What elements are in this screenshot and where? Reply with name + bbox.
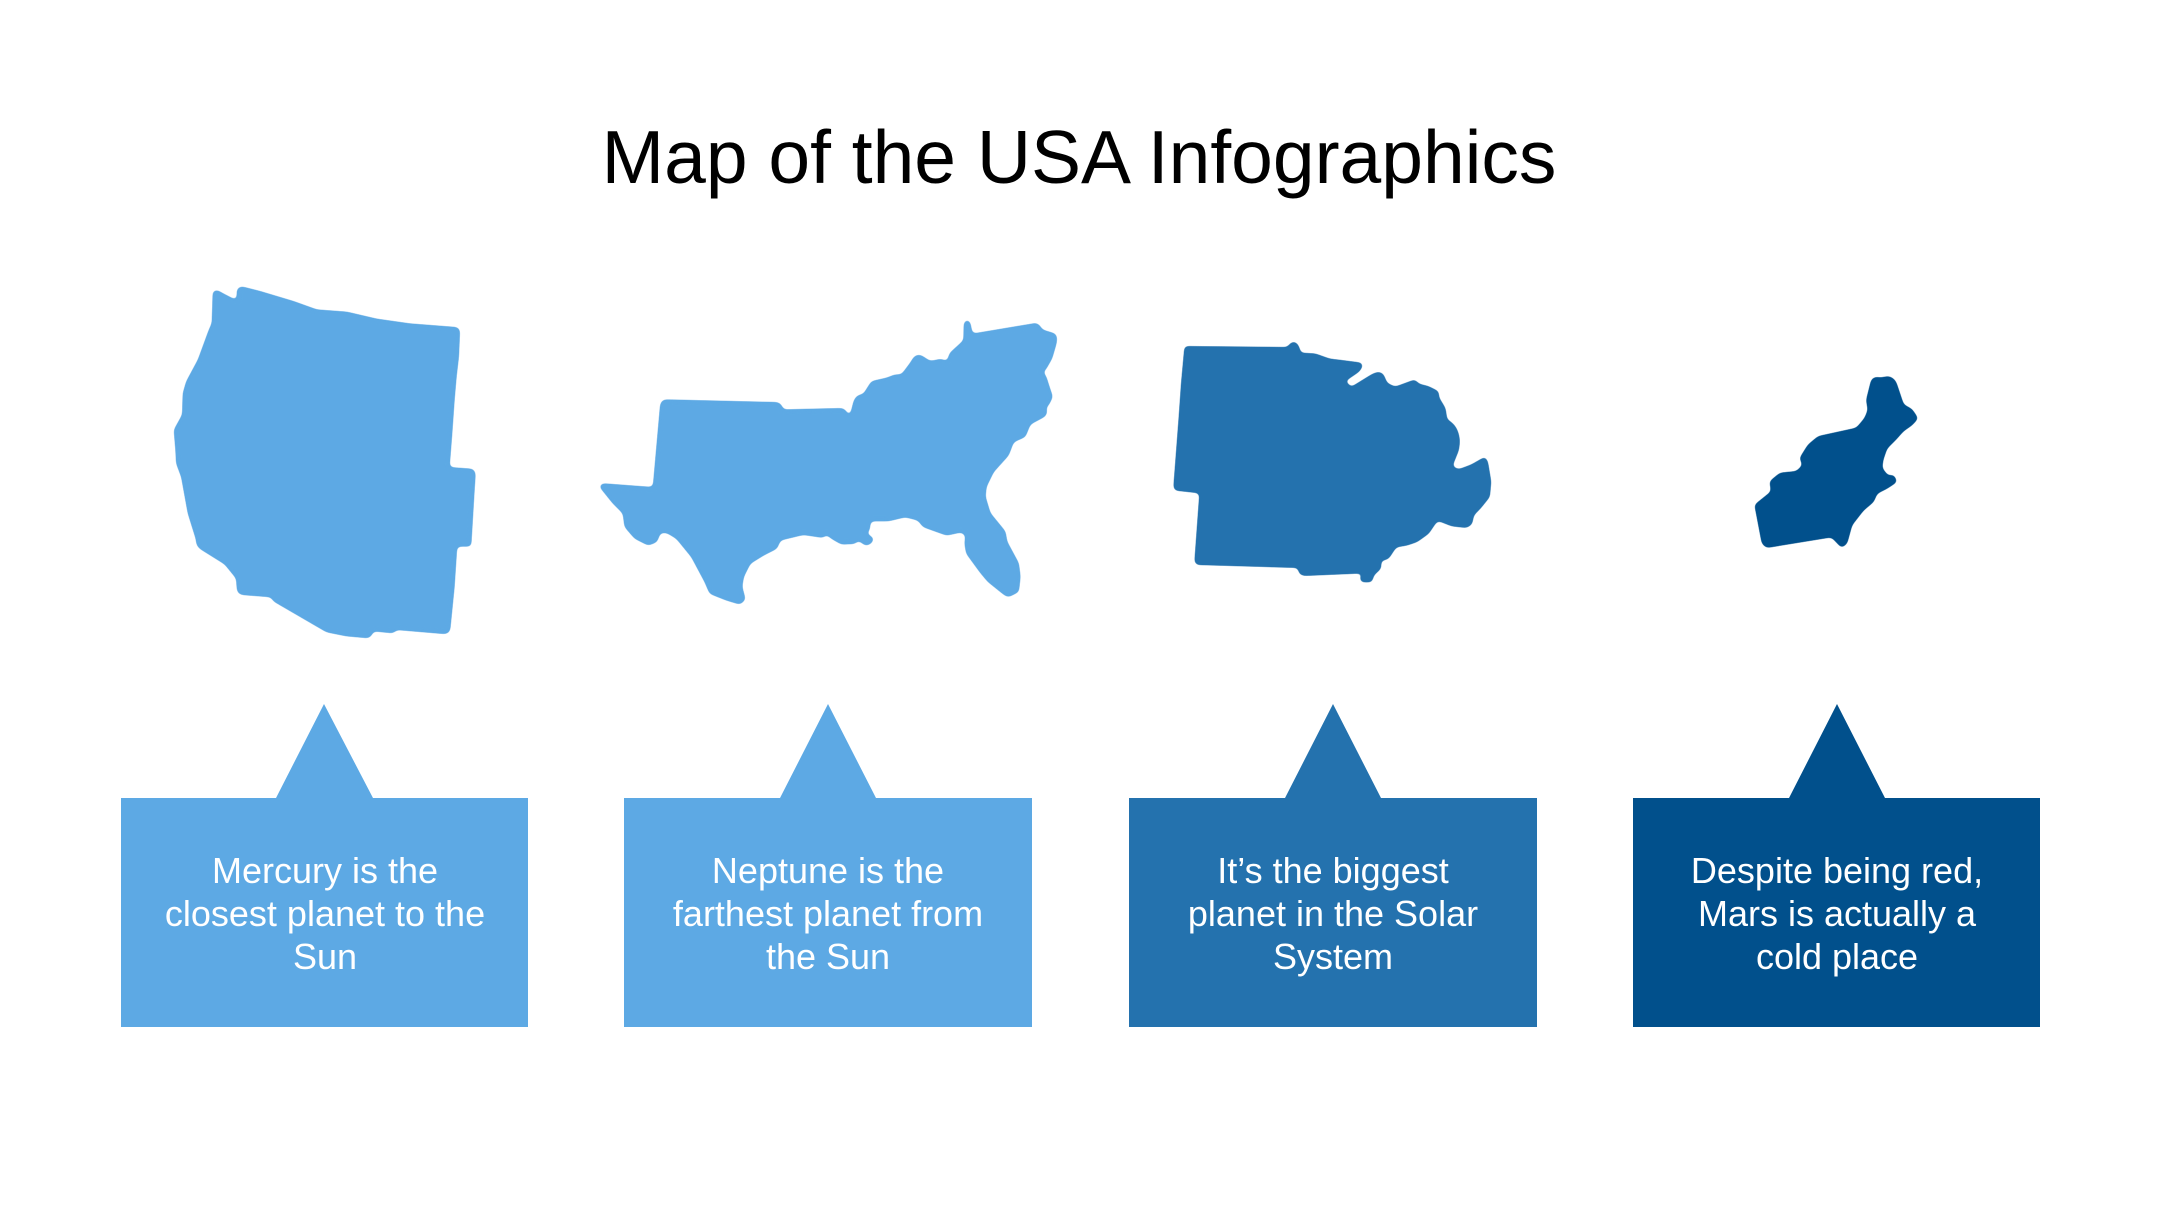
callout: Jupiter (1129, 704, 1537, 1027)
callout: Mercury (121, 704, 528, 1027)
callout: Mars: cold place (1756, 936, 1918, 977)
callout: Neptune (624, 704, 1032, 1027)
callout: Neptune: farthest planet from (673, 893, 983, 934)
map group: US regions (174, 286, 1918, 638)
callout: Neptune: Neptune is the (712, 850, 944, 891)
callout: Mercury: Mercury is the (212, 850, 438, 891)
callout: Jupiter: It’s the biggest (1217, 850, 1449, 891)
title: Map of the USA Infographics (602, 115, 1556, 199)
map: southern states (600, 320, 1056, 604)
callout: Mercury: Sun (293, 936, 357, 977)
map: northeastern states (1755, 377, 1918, 547)
callout: Jupiter: System (1273, 936, 1393, 977)
callout: Mars: Mars is actually a (1698, 893, 1976, 934)
map: western states (174, 287, 475, 638)
callout: Jupiter: planet in the Solar (1188, 893, 1478, 934)
map: midwestern states (1174, 342, 1491, 582)
callout: Neptune: the Sun (766, 936, 890, 977)
callout: Mars: Despite being red, (1691, 850, 1983, 891)
callout: Mercury: closest planet to the (165, 893, 485, 934)
callout: Mars (1633, 704, 2040, 1027)
